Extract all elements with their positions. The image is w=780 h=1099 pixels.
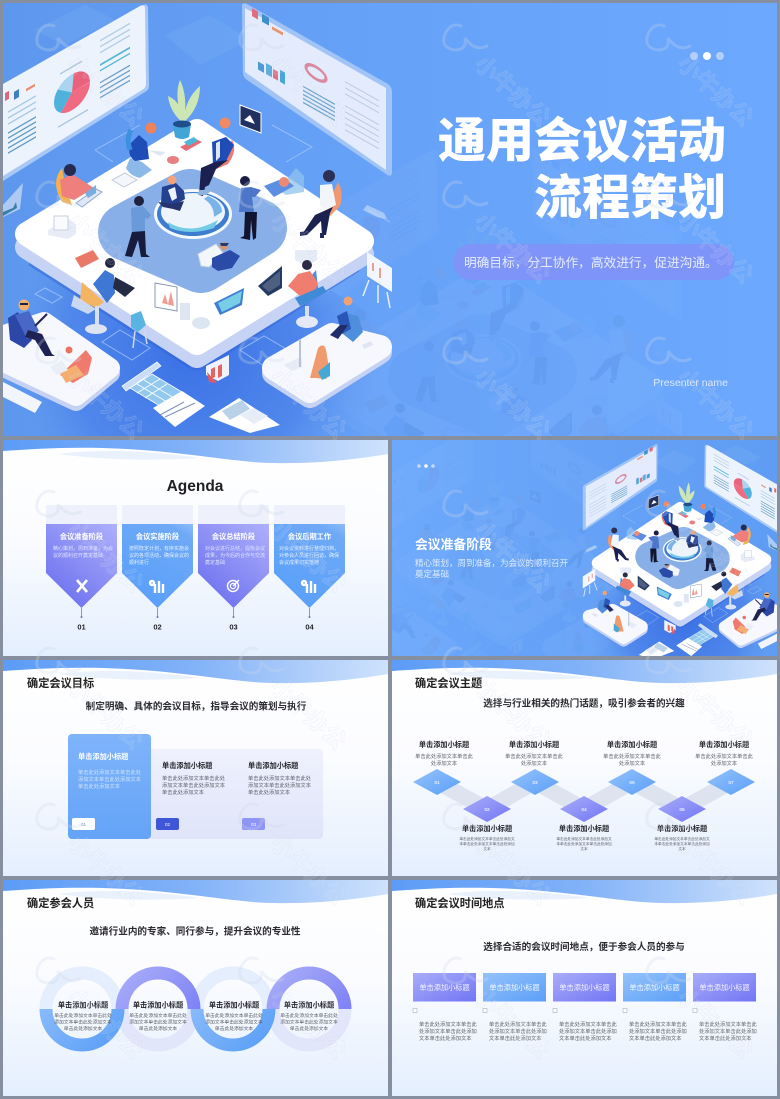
diamonds — [413, 769, 755, 822]
ring text 2: 添加文本单击此处添加文本 — [129, 1018, 187, 1026]
column 4: 文本单击此处添加文本 — [629, 1034, 682, 1042]
watermark layer: 小牛办公 — [63, 983, 148, 1064]
icon: bars — [150, 581, 163, 593]
column 1: 文本单击此处添加文本 — [419, 1034, 472, 1042]
section description: 精心策划，周到准备，为会议的顺利召开 — [415, 558, 569, 568]
section heading: 会议准备阶段 — [415, 537, 492, 552]
ring text 1 — [54, 1000, 112, 1032]
person: seated lower centre — [198, 242, 240, 271]
slide 2: agenda — [3, 440, 388, 656]
ring text 4: 单击此处添加文本 — [290, 1025, 328, 1032]
card 03: 添加文本单击此处添加文本 — [248, 781, 312, 789]
column 1: 单击此处添加文本单击此 — [419, 1020, 477, 1028]
title: 流程策划 — [534, 172, 726, 225]
agenda card 01: 议的顺利召开奠定基础 — [53, 552, 103, 559]
card 02: 添加文本单击此处添加文本 — [162, 781, 226, 789]
diamonds: 02 — [484, 807, 490, 813]
charts and papers — [3, 183, 280, 433]
card 01: 单击添加小标题 — [78, 752, 128, 761]
heading: 确定会议目标 — [27, 676, 94, 690]
agenda card 01: 精心策划，周到准备，为会 — [53, 545, 113, 552]
whiteboard — [363, 252, 392, 308]
left lower platform — [0, 300, 110, 401]
right data screen — [242, 3, 392, 176]
column 3 — [553, 973, 617, 1042]
watermark layer: 小牛办公 — [673, 50, 758, 131]
left data screen — [3, 4, 149, 181]
agenda card 01: 01 — [77, 622, 86, 632]
watermark layer: 小牛办公 — [470, 983, 555, 1064]
slide 3: section intro — [392, 440, 777, 656]
card 01: 01 — [81, 822, 86, 827]
column 4: 单击添加小标题 — [629, 983, 680, 992]
lower labels: 单击此处添加文本单击此处添加文 — [556, 836, 612, 841]
column 3: 文本单击此处添加文本 — [559, 1034, 612, 1042]
lower labels: 本单击此处添加文本单击此处添加 — [556, 841, 612, 846]
card 01 — [68, 734, 151, 839]
diamonds: 06 — [679, 807, 685, 813]
zigzag connectors — [437, 782, 731, 809]
column 2: 单击此处添加文本单击此 — [489, 1020, 547, 1028]
ring text 1: 单击添加小标题 — [58, 1000, 108, 1010]
column 4: 处添加文本单击此处添加 — [629, 1027, 687, 1035]
icon: tools — [77, 580, 87, 592]
agenda card 04 — [274, 505, 345, 632]
agenda card 02: 顺利进行 — [129, 559, 149, 566]
watermark layer: 小牛办公 — [673, 673, 758, 754]
right lower platform — [274, 296, 380, 396]
watermark layer: 小牛办公 — [470, 363, 555, 444]
ring text 3: 添加文本单击此处添加文本 — [205, 1018, 263, 1026]
column 3: 单击添加小标题 — [559, 983, 610, 992]
watermark layer: 小牛办公 — [63, 673, 148, 754]
watermark layer: 小牛办公 — [266, 983, 351, 1064]
watermark layer: 小牛办公 — [470, 829, 555, 910]
subtitle: 选择合适的会议时间地点，便于参会人员的参与 — [483, 941, 685, 953]
ring text 1: 单击此处添加文本 — [64, 1025, 102, 1032]
diamonds: 07 — [728, 780, 734, 786]
lower labels: 单击添加小标题 — [559, 824, 609, 833]
pagination dots — [690, 52, 724, 60]
lower labels: 文本 — [580, 846, 588, 851]
lower labels: 文本 — [483, 846, 491, 851]
card 02: 单击添加小标题 — [162, 761, 212, 770]
card 02: 02 — [165, 822, 170, 827]
subtitle: 邀请行业内的专家、同行参与，提升会议的专业性 — [89, 926, 301, 938]
slide 6: participants — [3, 880, 388, 1096]
agenda card 03: 成果，为今后的合作与交流 — [205, 552, 265, 559]
watermark layer: 小牛办公 — [63, 50, 148, 131]
card 01: 添加文本单击此处添加文本 — [78, 775, 142, 783]
watermark layer: 小牛办公 — [266, 829, 351, 910]
main platform — [27, 131, 362, 356]
ring text 4 — [280, 1000, 338, 1032]
heading: 确定会议主题 — [415, 676, 482, 690]
heading: 确定会议时间地点 — [415, 896, 505, 910]
agenda card 04: 04 — [305, 622, 314, 632]
top wave — [392, 660, 777, 683]
lower labels: 本单击此处添加文本单击此处添加 — [459, 841, 515, 846]
lower labels: 本单击此处添加文本单击此处添加 — [654, 841, 710, 846]
column 4: 单击此处添加文本单击此 — [629, 1020, 687, 1028]
watermark layer: 小牛办公 — [63, 207, 148, 288]
upper labels: 处添加文本 — [431, 759, 458, 767]
slide 7: time and place — [392, 880, 777, 1096]
title — [438, 115, 726, 225]
icon: bars — [302, 581, 315, 593]
agenda card 01 — [46, 505, 117, 632]
sign — [240, 105, 261, 133]
column 3: 处添加文本单击此处添加 — [559, 1027, 617, 1035]
watermark layer: 小牛办公 — [673, 516, 758, 597]
agenda card 03: 对会议进行总结，提炼会议 — [205, 545, 265, 552]
column 1 — [413, 973, 477, 1042]
column 1: 单击添加小标题 — [419, 983, 470, 992]
agenda card 02: 会议实施阶段 — [136, 532, 179, 541]
ring text 3: 单击添加小标题 — [209, 1000, 259, 1010]
ring text 2 — [129, 1000, 187, 1032]
agenda card 04: 会议成果切实落地 — [279, 559, 319, 566]
card 02: 单击此处添加文本 — [162, 788, 205, 796]
lower labels — [459, 824, 710, 851]
ring text 1: 添加文本单击此处添加文本 — [54, 1018, 112, 1026]
ring text 1: 单击此处添加文本单击此处 — [54, 1012, 112, 1019]
agenda card 04: 会议后期工作 — [288, 532, 331, 541]
person: standing right — [239, 176, 261, 240]
upper labels: 单击此处添加文本单击此 — [603, 752, 662, 760]
agenda card 03: 03 — [229, 622, 238, 632]
ring text 4: 添加文本单击此处添加文本 — [280, 1018, 338, 1026]
watermark layer: 小牛办公 — [470, 207, 555, 288]
column 5: 单击添加小标题 — [699, 983, 750, 992]
upper labels: 处添加文本 — [711, 759, 738, 767]
column 5: 处添加文本单击此处添加 — [699, 1027, 757, 1035]
isometric meeting illustration — [0, 3, 400, 436]
column 5: 单击此处添加文本单击此 — [699, 1020, 757, 1028]
plant — [168, 80, 200, 139]
ring text 3: 单击此处添加文本 — [215, 1025, 253, 1032]
lower labels: 单击添加小标题 — [462, 824, 512, 833]
diamonds: 03 — [532, 780, 538, 786]
faint ghost illustration — [396, 322, 622, 436]
card 03: 03 — [251, 822, 256, 827]
icon: target — [228, 580, 239, 592]
upper labels: 单击添加小标题 — [419, 740, 469, 749]
calendar grid — [122, 362, 182, 406]
subtitle pill: 明确目标，分工协作，高效进行，促进沟通。 — [464, 255, 718, 270]
watermark layer: 小牛办公 — [673, 363, 758, 444]
watermark layer: 小牛办公 — [470, 50, 555, 131]
column 2 — [483, 973, 547, 1042]
watermark layer: 小牛办公 — [266, 363, 351, 444]
ring text 4: 单击此处添加文本单击此处 — [280, 1012, 338, 1019]
small desk items — [48, 137, 317, 329]
top wave — [392, 880, 777, 903]
ring text 2: 单击添加小标题 — [133, 1000, 183, 1010]
section description: 奠定基础 — [415, 569, 449, 579]
watermark layer: 小牛办公 — [266, 207, 351, 288]
dots — [417, 464, 435, 468]
person: red shirt — [288, 260, 327, 328]
top wave — [3, 440, 388, 463]
section description — [415, 558, 569, 579]
ring chain — [46, 973, 345, 1045]
person: woman left — [56, 164, 102, 207]
subtitle: 制定明确、具体的会议目标，指导会议的策划与执行 — [86, 700, 307, 712]
upper labels: 处添加文本 — [521, 759, 548, 767]
upper labels: 单击添加小标题 — [699, 740, 749, 749]
diamonds: 04 — [581, 807, 587, 813]
agenda card 04: 对会议资料进行整理归档， — [279, 545, 339, 552]
card 01: 单击此处添加文本单击此处 — [78, 768, 142, 776]
column 3: 单击此处添加文本单击此 — [559, 1020, 617, 1028]
person: seated top left — [126, 122, 166, 178]
watermark layer: 小牛办公 — [63, 363, 148, 444]
ring text 3 — [205, 1000, 263, 1032]
person: woman right — [300, 170, 342, 238]
column 2: 单击添加小标题 — [489, 983, 540, 992]
subtitle pill — [453, 244, 734, 280]
upper labels: 单击此处添加文本单击此 — [695, 752, 754, 760]
lower labels: 单击此处添加文本单击此处添加文 — [459, 836, 515, 841]
ring text 2: 单击此处添加文本单击此处 — [129, 1012, 187, 1019]
top wave — [3, 880, 388, 903]
watermark layer: 小牛办公 — [63, 829, 148, 910]
ring text 4: 单击添加小标题 — [284, 1000, 334, 1010]
floor line art — [35, 125, 390, 366]
watermark layer: 小牛办公 — [63, 516, 148, 597]
agenda card 02: 议的各项活动，确保会议的 — [129, 552, 189, 559]
upper labels — [415, 740, 754, 767]
watermark layer: 小牛办公 — [673, 983, 758, 1064]
card 03: 单击此处添加文本单击此处 — [248, 774, 312, 782]
agenda card 02 — [122, 505, 193, 632]
lower labels: 单击添加小标题 — [657, 824, 707, 833]
upper labels: 单击此处添加文本单击此 — [505, 752, 564, 760]
lower labels: 单击此处添加文本单击此处添加文 — [654, 836, 710, 841]
card 03 — [242, 761, 312, 830]
person: seated centre — [158, 176, 185, 211]
card 03: 单击添加小标题 — [248, 761, 298, 770]
diamonds: 01 — [434, 780, 440, 786]
column 2: 文本单击此处添加文本 — [489, 1034, 542, 1042]
column 1: 处添加文本单击此处添加 — [419, 1027, 477, 1035]
agenda card 02: 按照既定计划，有序实施会 — [129, 545, 189, 552]
person: standing left — [125, 196, 151, 257]
slide 5: meeting theme — [392, 660, 777, 876]
watermark layer: 小牛办公 — [266, 516, 351, 597]
illustration — [579, 444, 780, 660]
watermark layer: 小牛办公 — [673, 207, 758, 288]
slide 1: cover — [3, 3, 777, 436]
watermark layer: 小牛办公 — [673, 829, 758, 910]
subtitle: 选择与行业相关的热门话题，吸引参会者的兴趣 — [483, 698, 685, 710]
watermark layer: 小牛办公 — [266, 673, 351, 754]
ring text 2: 单击此处添加文本 — [139, 1025, 177, 1032]
agenda card 03: 会议总结阶段 — [212, 532, 255, 541]
person: seated top right — [198, 118, 234, 196]
agenda card 02: 02 — [153, 622, 162, 632]
watermark layer: 小牛办公 — [470, 516, 555, 597]
column 5: 文本单击此处添加文本 — [699, 1034, 752, 1042]
column 5 — [693, 973, 757, 1042]
agenda card 01: 会议准备阶段 — [60, 532, 103, 541]
upper labels: 处添加文本 — [619, 759, 646, 767]
person: blue shirt with yellow chair — [71, 258, 135, 334]
card 01: 单击此处添加文本 — [78, 782, 121, 790]
watermark layer: 小牛办公 — [470, 673, 555, 754]
agenda card 03: 奠定基础 — [205, 559, 225, 566]
presenter name: Presenter name — [653, 377, 728, 389]
faint ghost illustration — [397, 552, 539, 608]
card 03: 单击此处添加文本 — [248, 788, 291, 796]
diamonds: 05 — [629, 780, 635, 786]
card 02 — [156, 761, 226, 830]
agenda card 04: 对参会人员进行回访，确保 — [279, 552, 339, 559]
upper labels: 单击添加小标题 — [607, 740, 657, 749]
column 2: 处添加文本单击此处添加 — [489, 1027, 547, 1035]
slide 4: meeting goals — [3, 660, 388, 876]
heading: 确定参会人员 — [27, 896, 94, 910]
lower labels: 文本 — [678, 846, 686, 851]
card 02: 单击此处添加文本单击此处 — [162, 774, 226, 782]
agenda card 03 — [198, 505, 269, 632]
title: 通用会议活动 — [438, 115, 726, 168]
blue chair — [131, 311, 147, 348]
column 4 — [623, 973, 687, 1042]
upper labels: 单击添加小标题 — [509, 740, 559, 749]
upper labels: 单击此处添加文本单击此 — [415, 752, 474, 760]
heading: Agenda — [167, 478, 224, 495]
ring text 3: 单击此处添加文本单击此处 — [205, 1012, 263, 1019]
watermark layer: 小牛办公 — [266, 50, 351, 131]
light panel — [148, 749, 323, 839]
top wave — [3, 660, 388, 683]
